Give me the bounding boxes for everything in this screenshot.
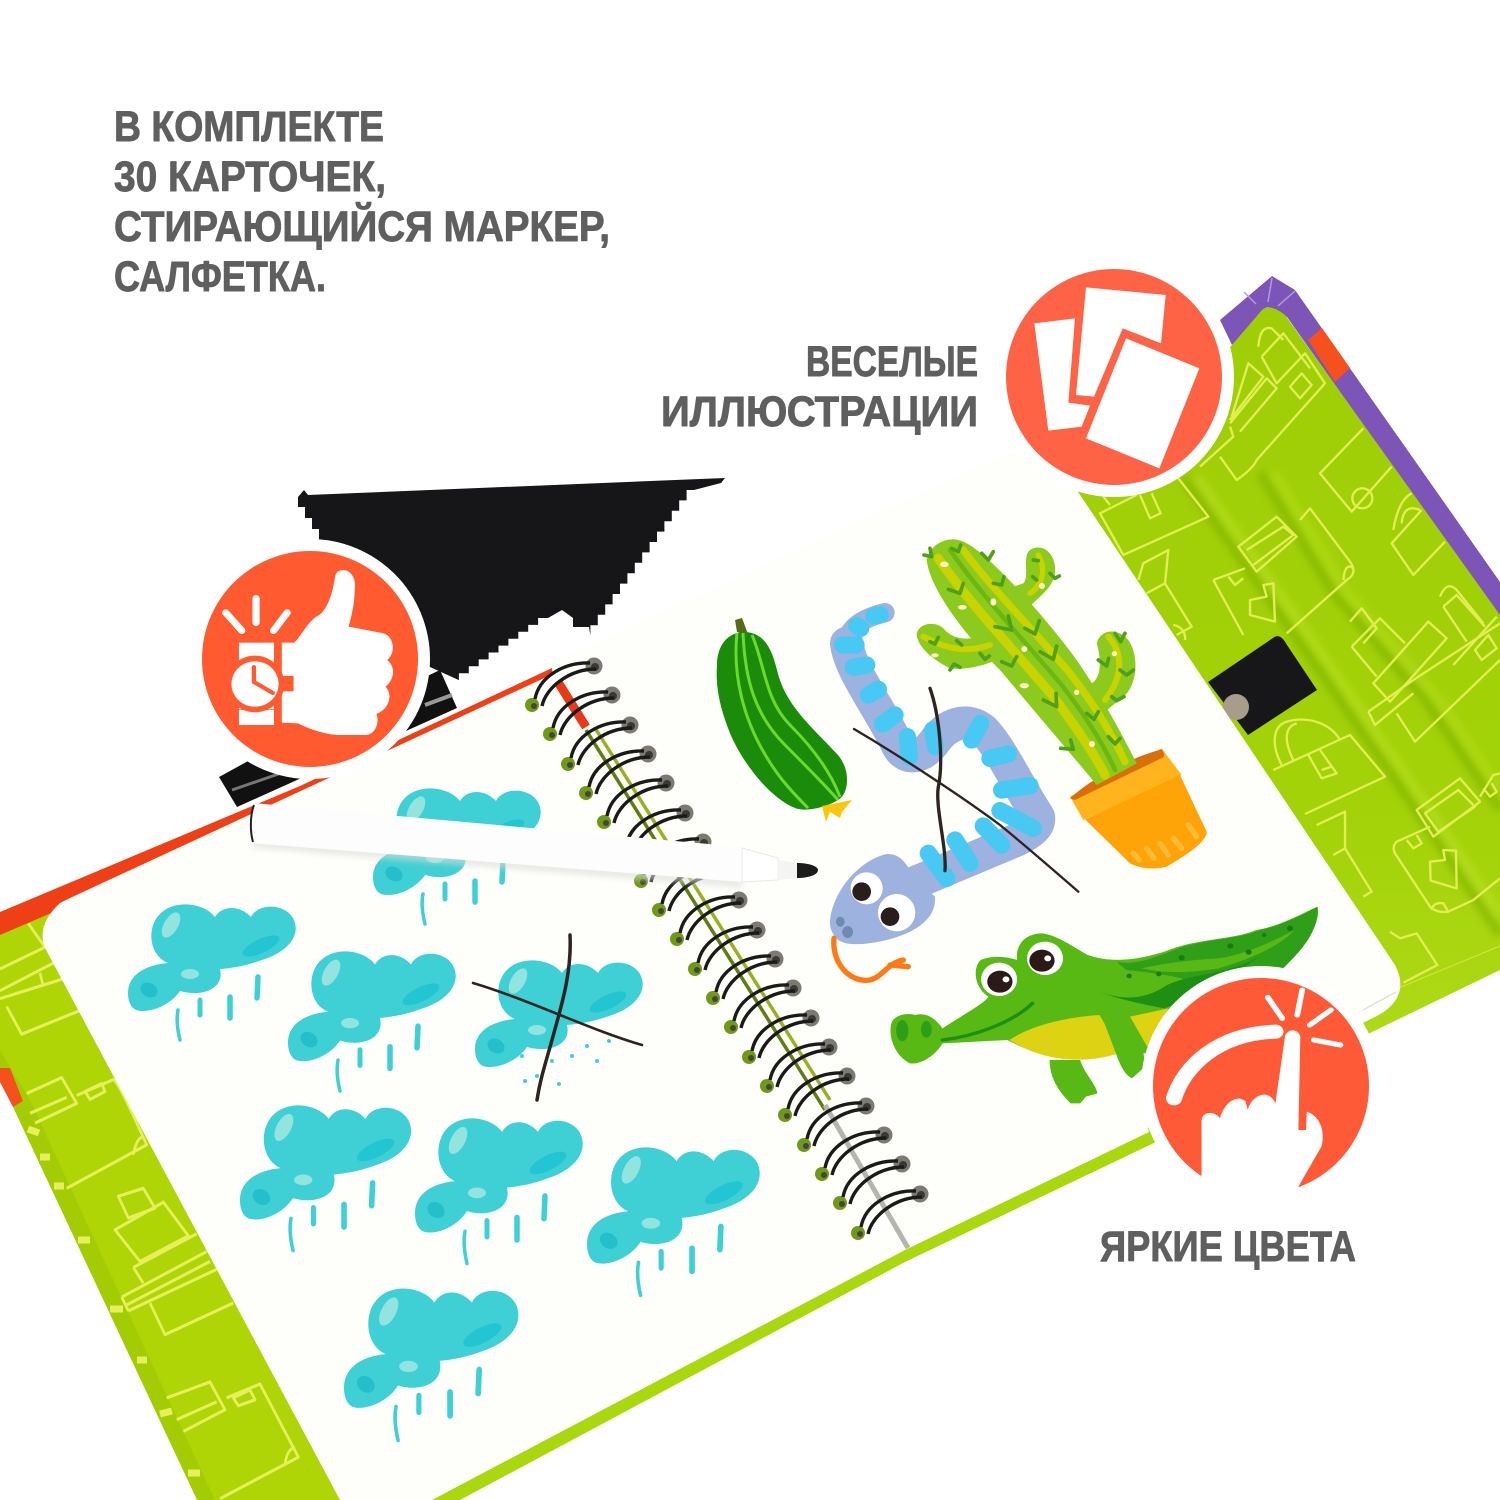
cloud 1 bbox=[128, 904, 296, 1040]
icon: thumbs up with watch bbox=[190, 539, 430, 779]
cloud 5 bbox=[415, 1118, 583, 1264]
cloud 8: behind marker bbox=[373, 788, 541, 924]
clouds on left page bbox=[128, 788, 760, 1440]
right cover: green inside with line pattern bbox=[1000, 307, 1500, 1135]
heading: set contents: САЛФЕТКА. bbox=[114, 253, 326, 301]
hand-drawn cross over snake bbox=[854, 688, 1078, 892]
elastic strap with rivet bbox=[1208, 636, 1317, 735]
cloud 3: crossed out with dots bbox=[475, 960, 643, 1086]
right cover: purple spine edge bbox=[1220, 276, 1500, 618]
illustration: crocodile bbox=[891, 907, 1318, 1103]
illustration: cucumber bbox=[717, 618, 852, 822]
heading: set contents: В КОМПЛЕКТЕ bbox=[114, 103, 384, 151]
left cover: green inside with line pattern bbox=[0, 900, 345, 1500]
heading: set contents: СТИРАЮЩИЙСЯ МАРКЕР, bbox=[114, 202, 610, 251]
white notebook pages bbox=[43, 448, 1400, 1500]
label: bright colours: ЯРКИЕ ЦВЕТА bbox=[1100, 1223, 1356, 1271]
label: funny illustrations: ВЕСЕЛЫЕ bbox=[806, 338, 978, 386]
illustration: snake bbox=[830, 613, 1039, 980]
heading: set contents bbox=[114, 103, 610, 301]
cloud 4 bbox=[240, 1105, 411, 1251]
spiral binding rings bbox=[525, 658, 928, 1240]
icon: finger tap bbox=[1141, 966, 1381, 1213]
black cleaning cloth bbox=[298, 478, 725, 680]
spiral spine bbox=[558, 682, 908, 1248]
cloud 7 bbox=[344, 1288, 518, 1440]
red edge of left cover bbox=[0, 668, 553, 935]
heading: set contents: 30 КАРТОЧЕК, bbox=[114, 153, 386, 201]
hand-drawn cross over cloud bbox=[473, 935, 642, 1100]
label: funny illustrations: ИЛЛЮСТРАЦИИ bbox=[661, 388, 978, 436]
black marker behind the book bbox=[219, 670, 457, 807]
label: funny illustrations bbox=[661, 338, 978, 436]
illustration: cactus in pot bbox=[917, 539, 1207, 869]
cloud 6 bbox=[587, 1147, 760, 1295]
cloud 2 bbox=[288, 951, 456, 1091]
lime cover strip under pages bbox=[432, 1130, 1156, 1500]
icon: cards bbox=[994, 257, 1234, 497]
white erasable marker bbox=[250, 803, 818, 888]
